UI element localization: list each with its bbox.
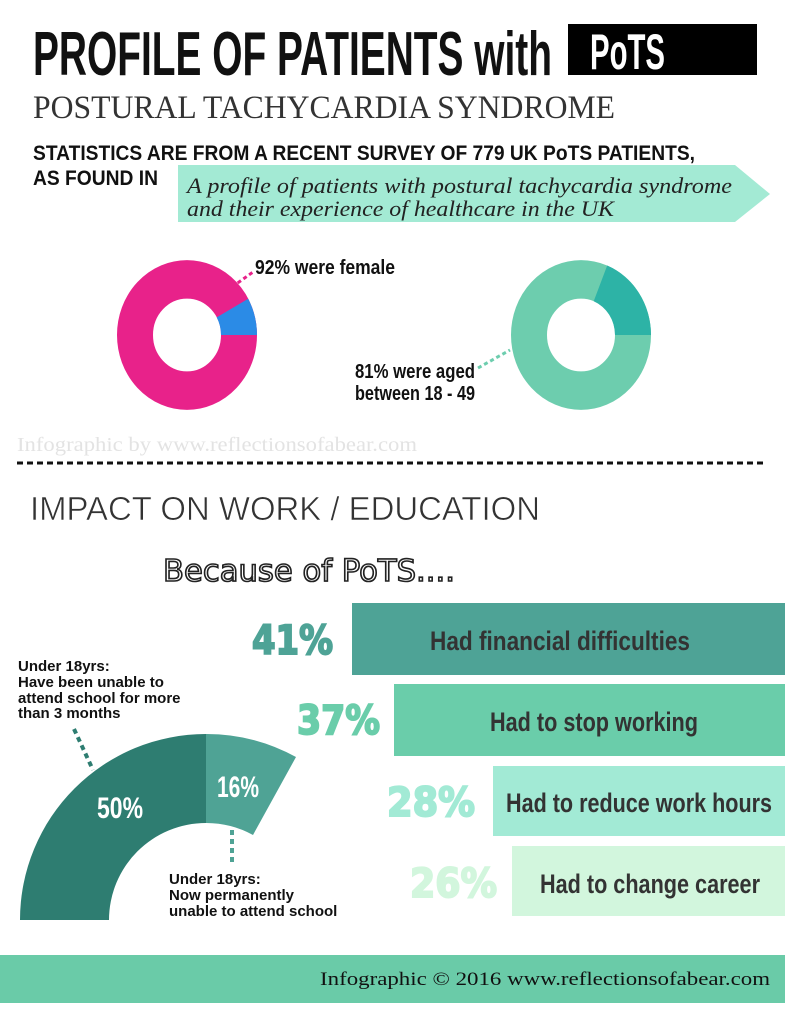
- bar: reduce work hours: [387, 766, 785, 836]
- bar: change career: [410, 846, 785, 916]
- label: 92% female: 92% were female: [255, 257, 395, 279]
- source statement: [33, 142, 695, 190]
- label: unable to attend school 3 months: attend school for more: [18, 690, 181, 707]
- leader: female: [232, 272, 253, 287]
- donut chart: age: [529, 266, 651, 391]
- label: permanently unable: Now permanently: [169, 887, 295, 904]
- arc chart: school: 16%: [217, 771, 259, 804]
- section heading: IMPACT ON WORK / EDUCATION: [30, 490, 540, 527]
- footer: [0, 955, 785, 1003]
- source statement: STATISTICS ARE FROM A RECENT SURVEY OF 779 UK PoTS PATIENTS,: [33, 142, 695, 165]
- label: unable to attend school 3 months: Have been unable to: [18, 674, 164, 691]
- label: 81% aged 18-49: between 18 - 49: [355, 383, 475, 405]
- label: permanently unable: Under 18yrs:: [169, 871, 261, 888]
- subtitle: POSTURAL TACHYCARDIA SYNDROME: [33, 90, 615, 126]
- subheading: Because of PoTS....: [163, 554, 455, 589]
- label: permanently unable: unable to attend school: [169, 903, 337, 920]
- bar: stop working: Had to stop working: [490, 707, 698, 737]
- bar: financial difficulties: [252, 603, 785, 675]
- label: unable to attend school 3 months: Under 18yrs:: [18, 658, 110, 675]
- bar: stop working: 37%: [297, 698, 380, 744]
- title badge: PoTS: PoTS: [590, 24, 665, 80]
- source statement: AS FOUND IN: [33, 167, 158, 190]
- label: 81% aged 18-49: 81% were aged: [355, 361, 475, 383]
- arrow banner: source paper: and their experience of healthcare in the UK: [187, 196, 615, 221]
- label: unable to attend school 3 months: than 3 months: [18, 705, 121, 722]
- bar: stop working: [297, 684, 785, 756]
- donut chart: female: [135, 279, 257, 391]
- bar: financial difficulties: 41%: [252, 618, 333, 664]
- leader: 16%: [230, 830, 234, 865]
- leader: 50%: [74, 729, 93, 770]
- title badge: PoTS: [568, 24, 757, 80]
- bar: financial difficulties: Had financial difficulties: [430, 626, 690, 656]
- arrow banner: source paper: A profile of patients with postural tachycardia syndrome: [185, 173, 732, 198]
- bar: change career: 26%: [410, 861, 497, 907]
- footer: Infographic © 2016 www.reflectionsofabear.com: [320, 969, 770, 990]
- leader: age: [478, 350, 510, 368]
- arc chart: school: [20, 734, 296, 920]
- arc chart: school: 50%: [97, 792, 143, 825]
- arrow banner: source paper: [178, 165, 770, 222]
- bar: reduce work hours: 28%: [387, 780, 475, 826]
- watermark: Infographic by www.reflectionsofabear.com: [17, 434, 417, 456]
